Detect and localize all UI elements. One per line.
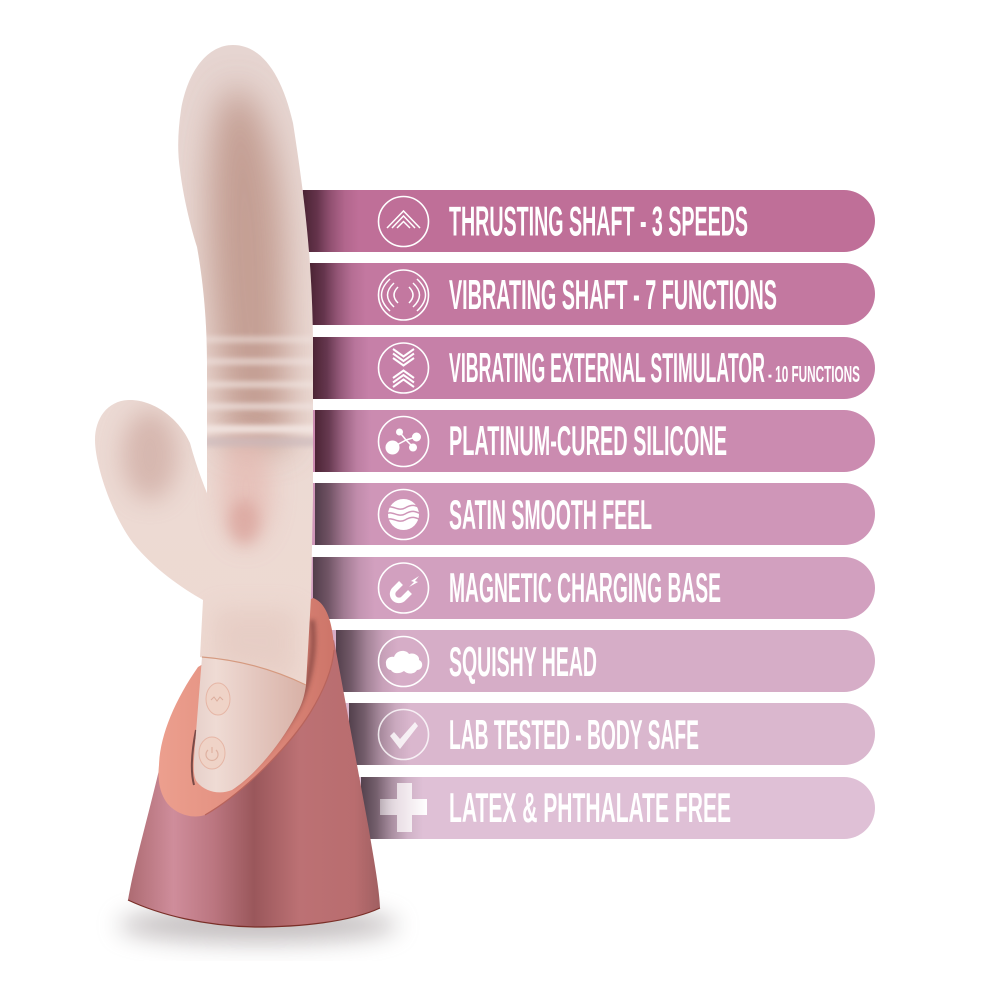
feature bar 6: magnetic charging base [290, 557, 875, 619]
icon: cloud [378, 636, 428, 686]
feature bar 8: lab tested: LAB TESTED - BODY SAFE [449, 711, 699, 758]
icon: chevrons up [378, 196, 428, 246]
button: vibration mode [206, 683, 230, 715]
icon: magnet and bolt [378, 563, 428, 613]
feature bar 1: thrusting shaft [290, 190, 875, 252]
feature bar 5: satin smooth feel [290, 483, 875, 545]
feature bar 7: squishy head: SQUISHY HEAD [449, 638, 597, 685]
product illustration [95, 45, 398, 943]
feature bar 4: platinum-cured silicone [290, 410, 875, 472]
icon: molecule [378, 416, 428, 466]
charging base scoop rim [159, 598, 334, 817]
feature bar 8: lab tested [290, 703, 875, 765]
charging base cone [128, 640, 380, 927]
feature bar 7: squishy head [290, 630, 875, 692]
floor shadow [118, 907, 398, 943]
product shaft and arm [95, 45, 320, 685]
feature bar 5: satin smooth feel: SATIN SMOOTH FEEL [449, 491, 652, 538]
icon: check mark [378, 710, 428, 760]
label: latex and phthalate free: LATEX & PHTHALATE FREE [449, 784, 731, 831]
feature bar 3: vibrating external stimulator [290, 337, 875, 399]
icon: plus [380, 783, 427, 832]
icon: opposing chevrons [378, 343, 428, 393]
icon: vibration arcs [378, 270, 428, 320]
ribbed section [200, 336, 320, 447]
button: power [199, 737, 225, 769]
panel: feature list [290, 190, 875, 839]
icon: striped sphere [378, 490, 428, 540]
feature bar 2: vibrating shaft [290, 263, 875, 325]
handle with control buttons [194, 657, 306, 792]
label: vibrating external stimulator: - 10 FUNCTIONS [768, 361, 860, 387]
feature bar 9: latex and phthalate free [290, 777, 875, 839]
